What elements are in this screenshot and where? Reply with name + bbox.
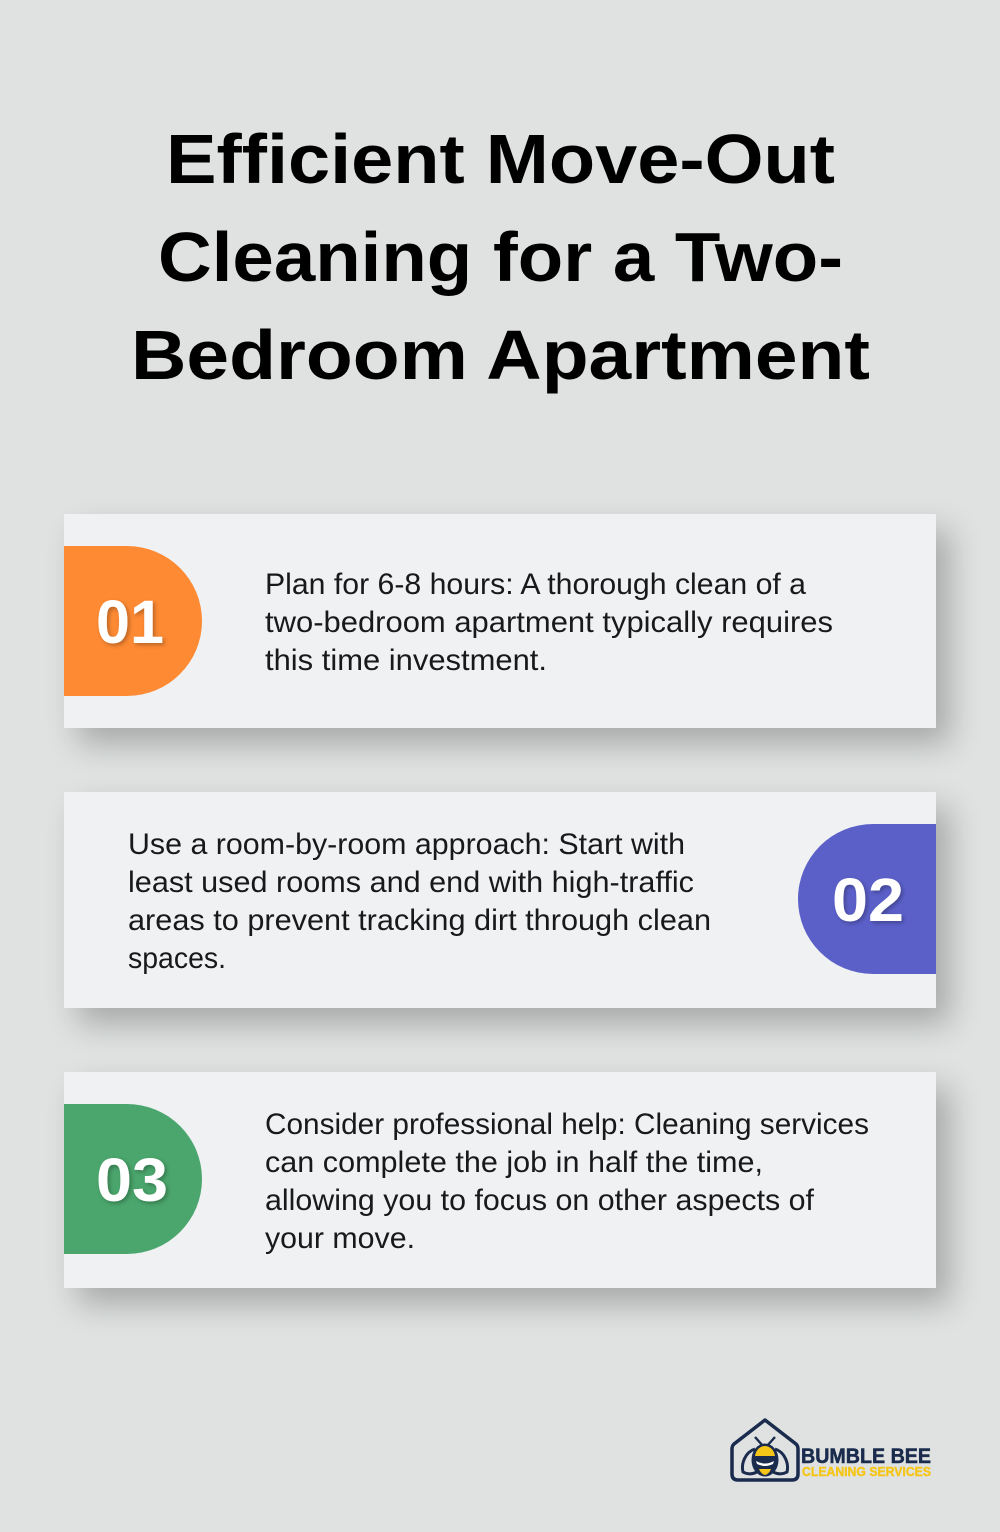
text: step 02: Use a room-by-room approach: Start with (128, 828, 685, 861)
panel: step 01 (64, 514, 950, 744)
text: step 01: Plan for 6-8 hours: A thorough clean of a (265, 568, 806, 601)
logo: Bumble Bee Cleaning Services (732, 1420, 931, 1480)
badge: 02 (798, 824, 936, 974)
text: step 02: least used rooms and end with high-traffic (128, 866, 694, 899)
logo wordmark: CLEANING SERVICES (802, 1465, 931, 1479)
text: step 03: allowing you to focus on other aspects of (265, 1184, 815, 1217)
icon: house with bee (732, 1420, 798, 1480)
title: Cleaning for a Two- (158, 218, 843, 296)
text: step 01: this time investment. (265, 644, 547, 677)
text: step 03: Consider professional help: Cleaning services (265, 1108, 869, 1141)
text: step 03: your move. (265, 1222, 415, 1255)
panel: step 02 (64, 792, 950, 1024)
panel: step 03 (64, 1072, 950, 1304)
logo wordmark: BUMBLE BEE (801, 1445, 931, 1468)
text: step 01 (265, 568, 833, 677)
text: step 01: two-bedroom apartment typically requires (265, 606, 833, 639)
text: step 02: areas to prevent tracking dirt through clean (128, 904, 711, 937)
text: step 03 (265, 1108, 869, 1255)
logo wordmark (801, 1445, 931, 1479)
text: step 02: spaces. (128, 942, 226, 975)
badge: 01: 01 (96, 588, 164, 656)
badge: 03: 03 (96, 1146, 168, 1214)
title: Efficient Move-Out (166, 120, 835, 198)
text: step 03: can complete the job in half the time, (265, 1146, 763, 1179)
badge: 02: 02 (832, 866, 904, 934)
title: Bedroom Apartment (131, 316, 870, 394)
badge: 01 (64, 546, 202, 696)
title (131, 120, 870, 394)
badge: 03 (64, 1104, 202, 1254)
text: step 02 (128, 828, 711, 975)
